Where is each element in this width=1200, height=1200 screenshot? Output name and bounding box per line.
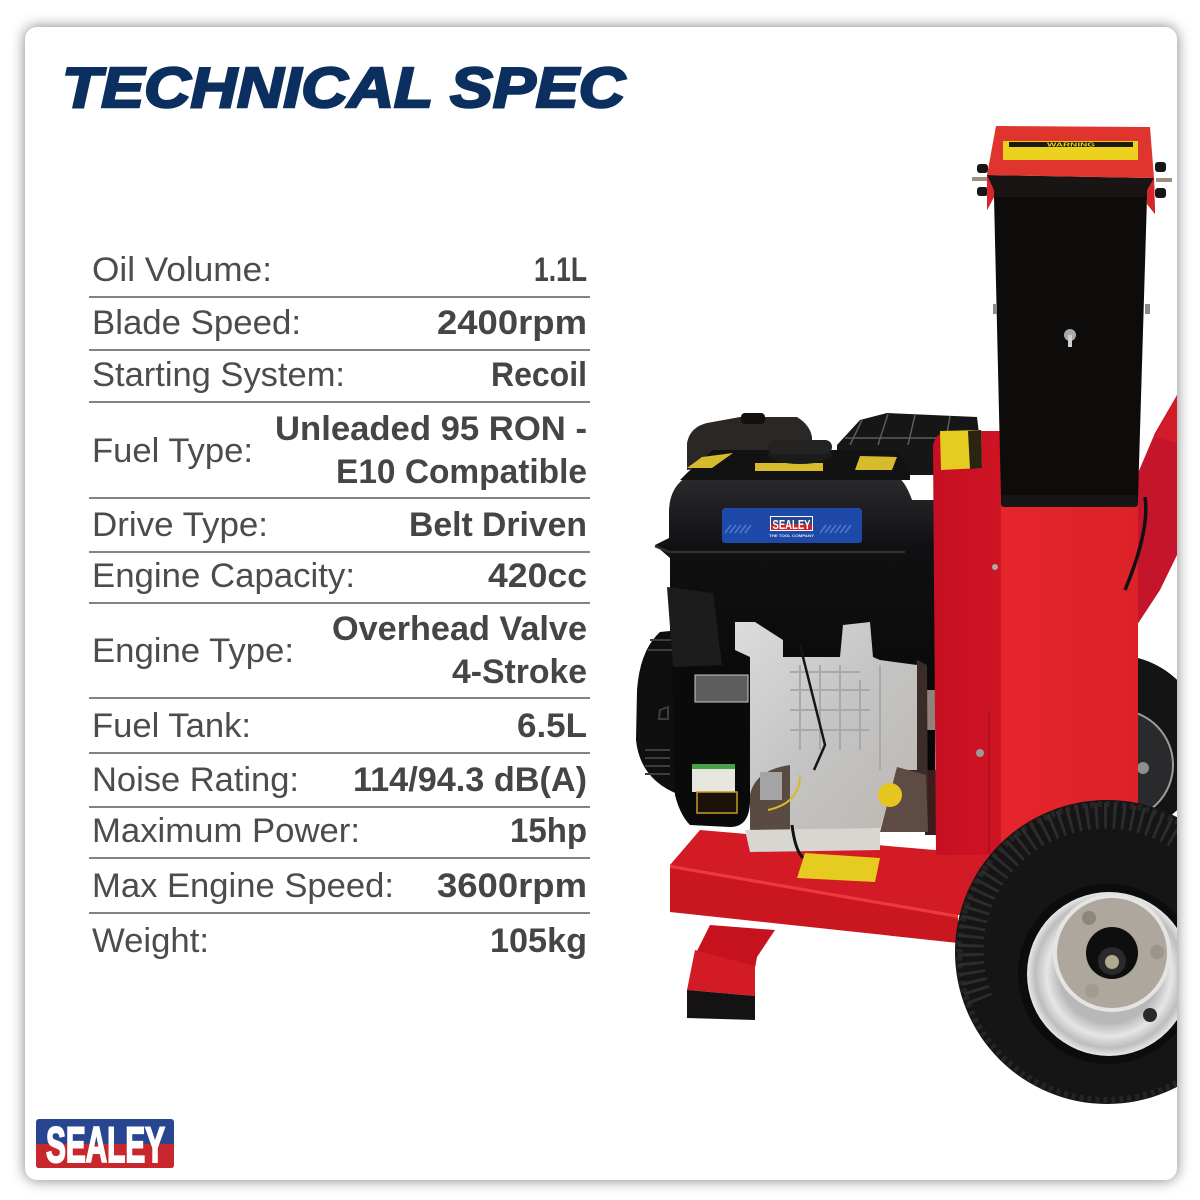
row: blade speed: 2400rpm (437, 304, 587, 342)
row: noise rating: Noise Rating: (92, 761, 299, 799)
Sealey logo (36, 1117, 174, 1173)
rear arm (1135, 395, 1177, 625)
yellow oil cap (878, 783, 902, 807)
row: max engine speed: 3600rpm (437, 867, 587, 905)
recoil starter cover (636, 630, 750, 827)
Sealey logo: SEALEY (46, 1117, 165, 1173)
row: starting system (92, 356, 587, 394)
blue Sealey tank label: THE TOOL COMPANY (769, 533, 814, 538)
row: fuel type: Unleaded 95 RON - (275, 410, 587, 448)
main red housing front (1001, 500, 1138, 860)
row: blade speed: Blade Speed: (92, 304, 301, 342)
row: weight (92, 922, 587, 960)
row: max engine speed (92, 867, 587, 905)
blue Sealey tank label: SEALEY (772, 517, 811, 532)
row: weight: Weight: (92, 922, 209, 960)
engine fuel tank (655, 440, 935, 770)
row: blade speed (92, 304, 587, 342)
row: maximum power: Maximum Power: (92, 812, 360, 850)
row: drive type: Belt Driven (409, 506, 587, 544)
power cable (1125, 497, 1146, 590)
engine labels (692, 764, 737, 813)
row: engine capacity (92, 557, 587, 595)
product illustration: wood chipper (636, 126, 1200, 1104)
rear engine parts and guard (687, 413, 979, 475)
row: engine type: 4-Stroke (452, 653, 587, 691)
row: starting system: Recoil (491, 356, 587, 394)
row: drive type (92, 506, 587, 544)
row: fuel type (92, 410, 587, 491)
row: starting system: Starting System: (92, 356, 345, 394)
row: fuel tank (92, 707, 587, 745)
row: weight: 105kg (490, 922, 587, 960)
row: engine capacity: 420cc (488, 557, 587, 595)
housing warning label (940, 430, 982, 470)
row: drive type: Drive Type: (92, 506, 268, 544)
blue Sealey tank label (722, 508, 862, 543)
frame base plate (670, 830, 1010, 943)
row: fuel type: E10 Compatible (336, 453, 587, 491)
row: engine type: Overhead Valve (332, 610, 587, 648)
row: maximum power: 15hp (510, 812, 587, 850)
specification table (89, 251, 590, 960)
front wheel (955, 800, 1200, 1104)
silver crankcase (735, 622, 936, 858)
row: oil volume: 1.1L (534, 251, 587, 289)
row: engine type (92, 610, 587, 691)
row: engine type: Engine Type: (92, 632, 294, 670)
row: noise rating: 114/94.3 dB(A) (353, 761, 587, 799)
row: max engine speed: Max Engine Speed: (92, 867, 394, 905)
row: engine capacity: Engine Capacity: (92, 557, 355, 595)
title: TECHNICAL SPEC (62, 56, 626, 120)
row: fuel tank: Fuel Tank: (92, 707, 251, 745)
chute hood with warning plate: WARNING (1047, 142, 1095, 148)
row: oil volume (92, 251, 587, 289)
left side housing panel (933, 430, 1002, 855)
row: noise rating (92, 761, 587, 799)
row: fuel tank: 6.5L (517, 707, 587, 745)
row: oil volume: Oil Volume: (92, 251, 272, 289)
base warning label (797, 853, 880, 882)
rear wheel (1138, 658, 1177, 815)
row: maximum power (92, 812, 587, 850)
row: fuel type: Fuel Type: (92, 432, 253, 470)
chute hood with warning plate (972, 126, 1172, 214)
feed chute (993, 197, 1150, 507)
engine side baffle (667, 587, 722, 667)
support foot (687, 925, 775, 1020)
